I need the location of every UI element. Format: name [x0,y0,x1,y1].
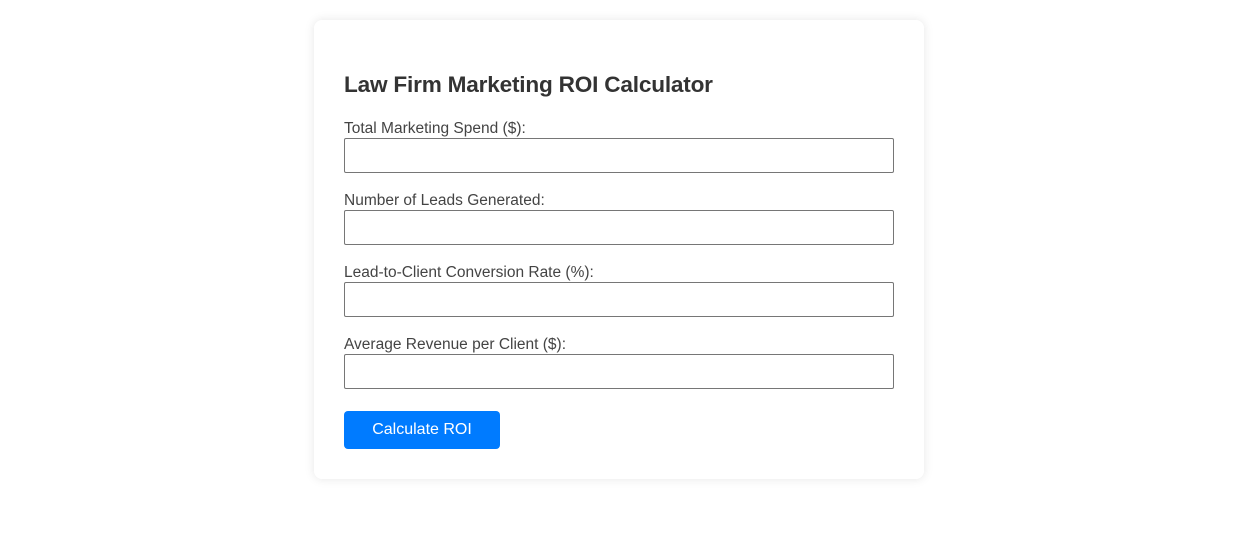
label: leads: Number of Leads Generated: [344,192,545,209]
input: spend [344,138,894,173]
label: conversion: Lead-to-Client Conversion Rate (%): [344,264,594,281]
button: Calculate ROI [372,421,472,438]
input: revenue [344,354,894,389]
label: spend: Total Marketing Spend ($): [344,120,526,137]
button [344,411,500,449]
panel: calculator card [314,20,924,479]
label: revenue: Average Revenue per Client ($): [344,336,566,353]
input: conversion [344,282,894,317]
title: Law Firm Marketing ROI Calculator [344,72,713,97]
input: leads [344,210,894,245]
